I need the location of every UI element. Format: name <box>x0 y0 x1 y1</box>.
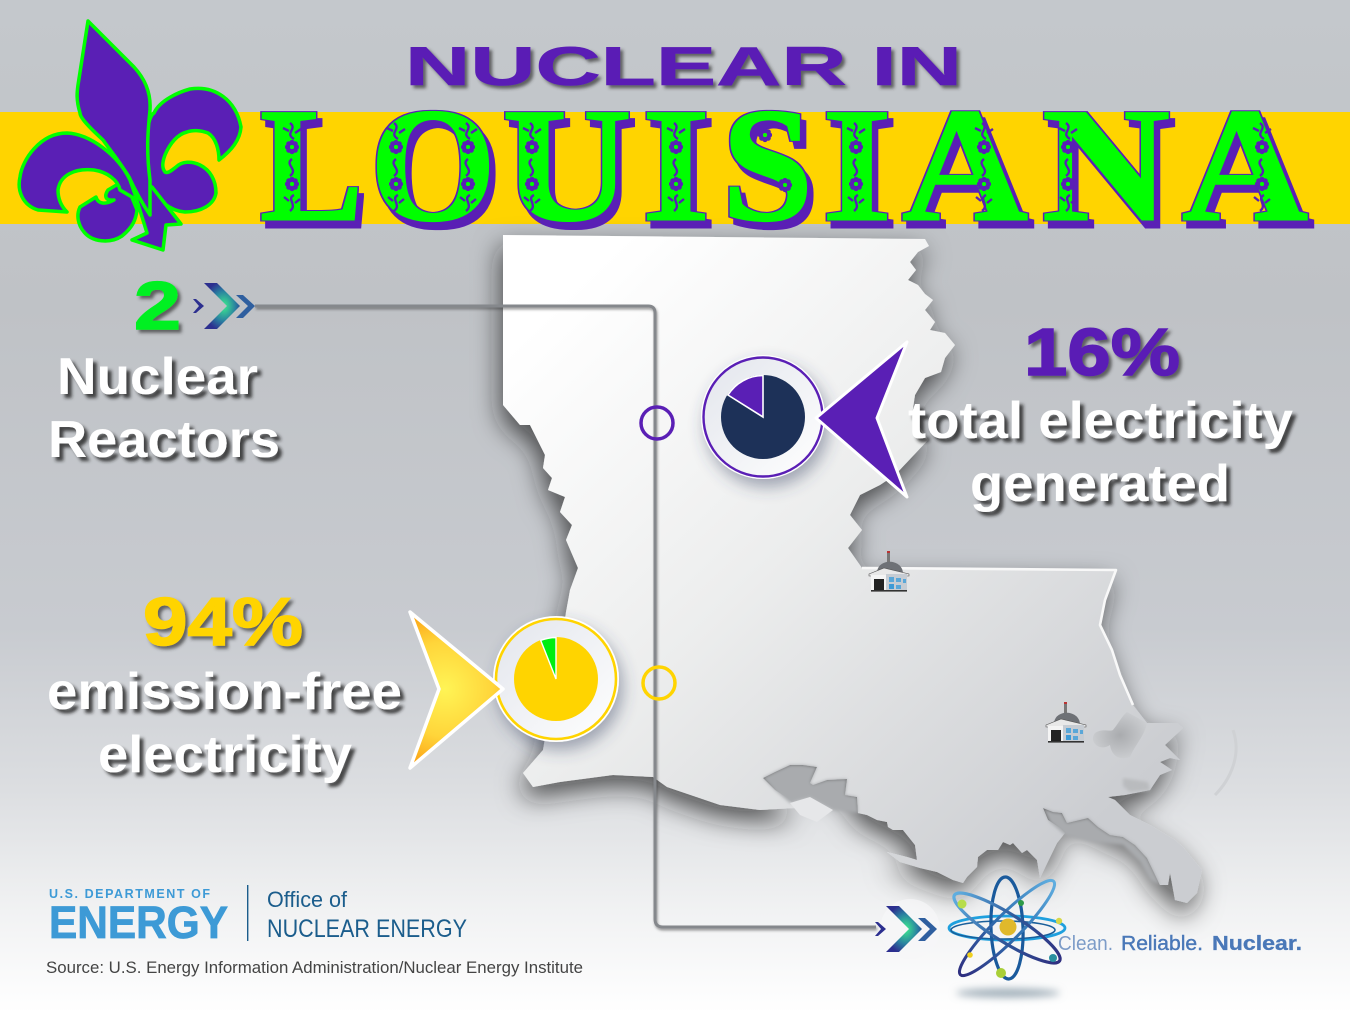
connector line from reactors to atom <box>255 306 876 927</box>
stat: 94% emission-free electricity: electricity <box>98 726 352 784</box>
title: LOUISIANA: U <box>502 75 632 256</box>
Barataria bay shading <box>1043 808 1160 885</box>
label: Nuclear Reactors: Nuclear <box>57 348 258 406</box>
U.S. Department of Energy logo: ENERGY <box>49 897 228 948</box>
letter ornaments <box>283 123 1271 211</box>
U.S. Department of Energy logo <box>49 885 467 948</box>
U.S. Department of Energy logo: NUCLEAR ENERGY <box>267 915 467 943</box>
label: Nuclear Reactors: Reactors <box>48 411 280 469</box>
stat: 94% emission-free electricity: 94% <box>143 584 303 660</box>
Vermilion bay water <box>763 765 858 813</box>
title: LOUISIANA: L <box>260 75 363 256</box>
icon: reactor north <box>869 551 909 592</box>
stat: 94% pie chart <box>494 617 618 741</box>
stat: 94% emission-free electricity: emission-free <box>47 663 402 721</box>
arrow: purple pointing to pie <box>816 342 907 497</box>
yellow title band <box>0 112 1350 224</box>
Marsh Island <box>790 797 833 822</box>
label: Nuclear Reactors <box>48 348 280 469</box>
title: NUCLEAR IN: NUCLEAR IN <box>405 35 962 97</box>
stat: 16% total electricity generated: total electricity <box>908 392 1293 450</box>
barrier island curve <box>1215 730 1236 795</box>
title: LOUISIANA: A <box>1182 75 1308 256</box>
title: LOUISIANA: N <box>1042 75 1170 256</box>
reactors marker <box>48 268 280 469</box>
stat: 16% pie chart <box>702 356 824 478</box>
U.S. Department of Energy logo: U.S. DEPARTMENT OF <box>49 887 210 901</box>
river edge highlight <box>862 568 1133 705</box>
title: LOUISIANA <box>260 75 1308 256</box>
title: LOUISIANA: A <box>902 75 1028 256</box>
source note: Source: U.S. Energy Information Administration/Nuclear Energy Institute <box>46 959 583 977</box>
tagline: Clean. <box>1058 933 1113 955</box>
map of Louisiana <box>503 235 1236 903</box>
tagline: Nuclear. <box>1212 933 1302 955</box>
stat: 16% total electricity generated: 16% <box>1024 315 1180 390</box>
icon: atom logo <box>947 872 1067 998</box>
Lake Pontchartrain <box>1093 712 1147 758</box>
arrow: yellow pointing to pie <box>410 612 503 768</box>
title: LOUISIANA: S <box>722 75 813 256</box>
atom shadow <box>956 988 1060 998</box>
map marker rings <box>641 407 675 699</box>
stat: 16% total electricity generated <box>908 315 1293 513</box>
small eastern marsh patch <box>1123 778 1150 792</box>
stat: 16% total electricity generated: generated <box>970 455 1230 513</box>
icon: fleur-de-lis <box>19 21 241 250</box>
stat: 94% emission-free electricity <box>47 584 402 784</box>
chevrons beside atom <box>875 899 940 959</box>
title: LOUISIANA: O <box>370 75 496 256</box>
tagline <box>1058 933 1302 955</box>
title: LOUISIANA: I <box>642 75 710 256</box>
U.S. Department of Energy logo: Office of <box>267 887 348 912</box>
chevrons beside the number <box>193 283 255 329</box>
tagline: Reliable. <box>1121 933 1203 955</box>
title: LOUISIANA: I <box>822 75 892 256</box>
map land shape <box>503 235 1202 903</box>
number 2: 2 <box>134 268 181 344</box>
icon: reactor south <box>1046 702 1086 743</box>
